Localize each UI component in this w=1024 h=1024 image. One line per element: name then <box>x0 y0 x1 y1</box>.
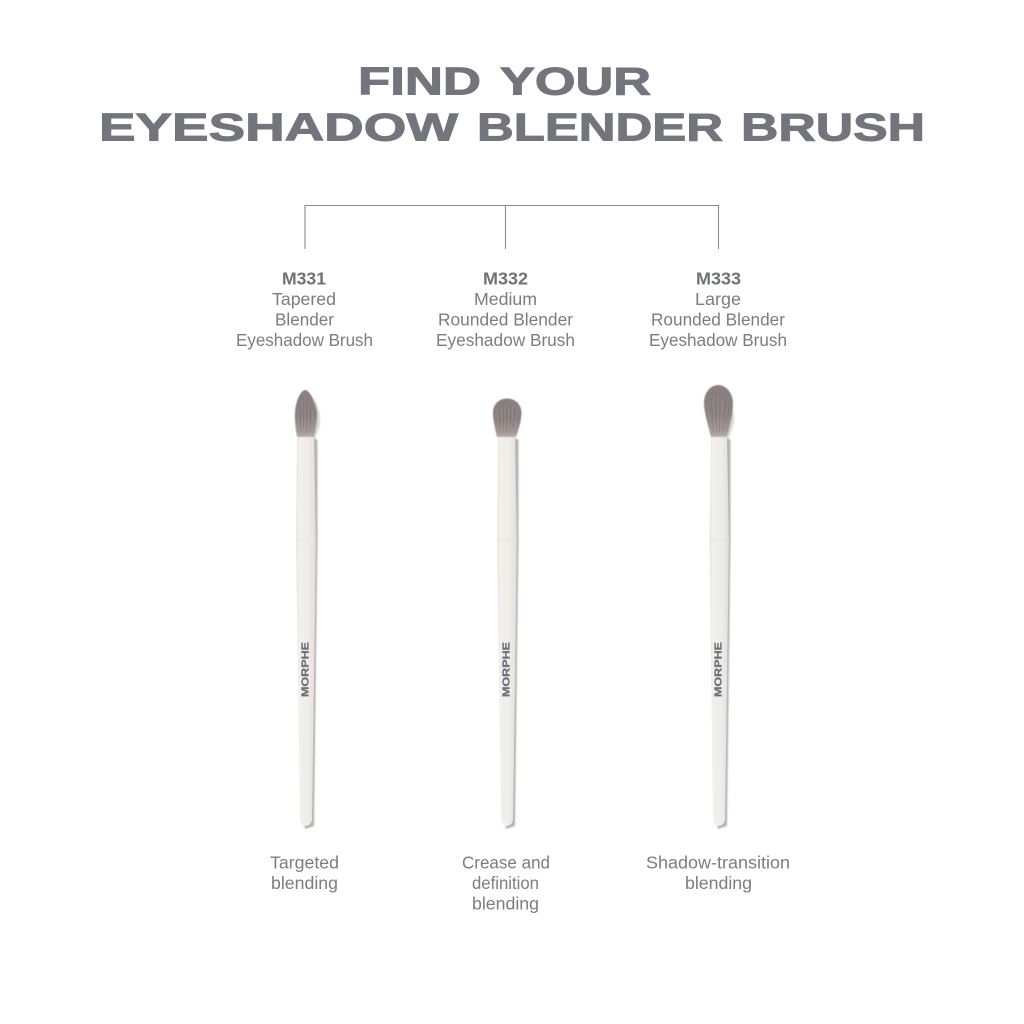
label: M332: Rounded Blender <box>438 310 573 330</box>
logo: MORPHE <box>300 642 312 697</box>
label: M333: M333 <box>696 268 741 288</box>
label: M333: Eyeshadow Brush <box>649 330 787 350</box>
logo: MORPHE <box>714 642 724 697</box>
brush: M333 <box>704 385 734 829</box>
bristle shadow <box>313 398 320 442</box>
handle shadow <box>304 437 318 829</box>
label: M333: Rounded Blender <box>651 310 785 330</box>
caption: M331 use: blending <box>271 873 338 893</box>
title <box>99 60 925 150</box>
caption: M331 use <box>270 852 339 893</box>
caption: M332 use: blending <box>472 894 539 914</box>
caption: M333 use: Shadow-transition <box>646 852 790 872</box>
caption: M333 use <box>646 852 790 893</box>
handle <box>296 437 316 826</box>
caption: M331 use: Targeted <box>270 852 339 872</box>
bristles <box>493 398 522 437</box>
bracket connector <box>305 206 718 249</box>
bristles <box>295 390 317 437</box>
caption: M332 use: definition <box>472 873 539 893</box>
brush: M332 <box>493 398 522 829</box>
label: M331: Tapered <box>272 289 336 309</box>
label: M331: Blender <box>275 310 334 330</box>
caption: M333 use: blending <box>685 873 752 893</box>
label: M331: M331 <box>282 268 326 288</box>
bristles <box>704 385 733 437</box>
bristle shadow <box>727 400 734 442</box>
handle <box>497 437 517 826</box>
label: M332: Medium <box>474 289 537 309</box>
logo: MORPHE <box>502 642 512 697</box>
label: M333: Large <box>695 289 741 309</box>
title: BLENDER <box>477 106 723 150</box>
title: BRUSH <box>741 106 925 150</box>
title: EYESHADOW <box>99 106 458 150</box>
caption: M332 use <box>462 852 550 914</box>
title: FIND <box>358 60 481 104</box>
label: M331: Eyeshadow Brush <box>236 330 373 350</box>
label: M332: M332 <box>483 268 528 288</box>
label: M332: Eyeshadow Brush <box>436 330 575 350</box>
title: YOUR <box>500 60 651 104</box>
handle <box>710 437 729 826</box>
handle shadow <box>505 437 518 829</box>
caption: M332 use: Crease and <box>462 852 550 872</box>
label: M331 <box>236 268 373 350</box>
brush: M331 <box>295 390 320 829</box>
handle shadow <box>717 437 730 829</box>
label: M333 <box>649 268 787 350</box>
label: M332 <box>436 268 575 350</box>
